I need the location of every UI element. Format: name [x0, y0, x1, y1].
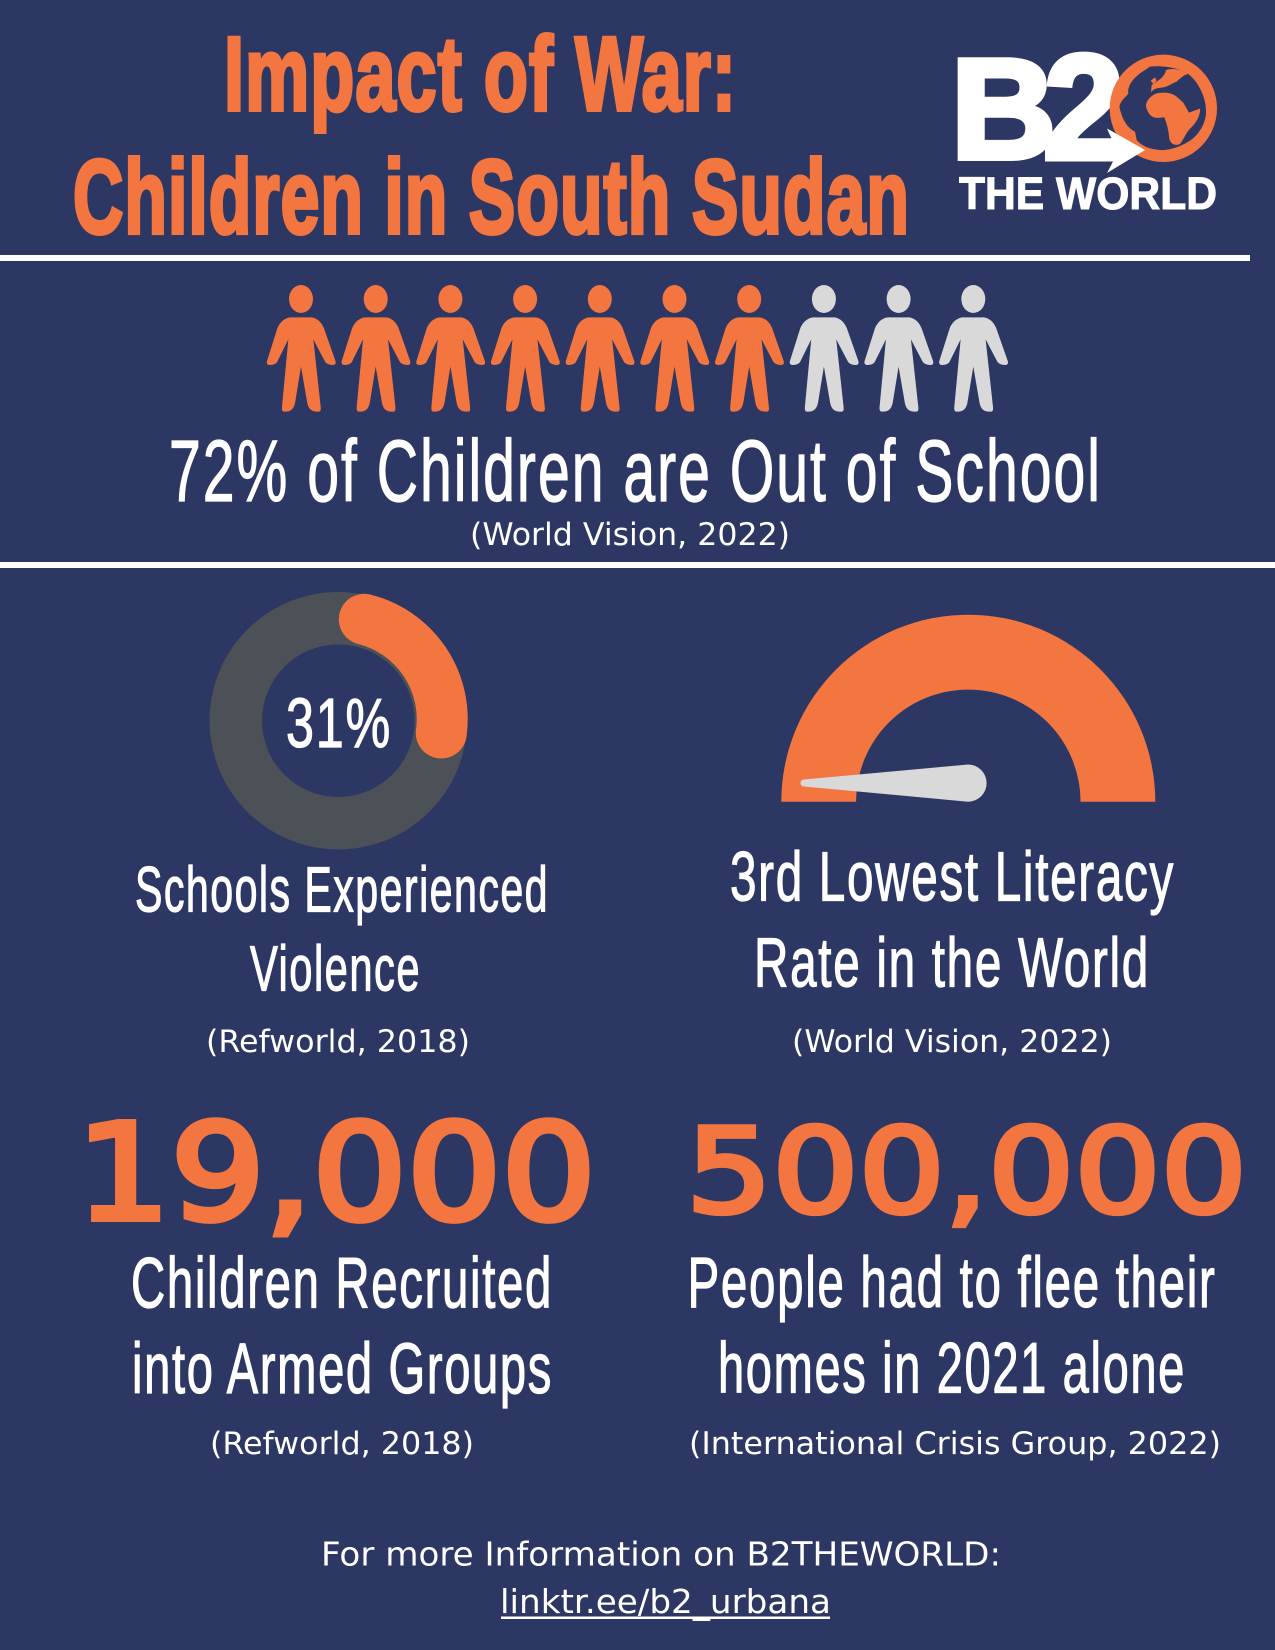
pictogram: 7 of 10 children	[267, 285, 1008, 412]
logo B2 lettering: 2	[1044, 25, 1124, 190]
logo B2 lettering	[951, 25, 1124, 190]
footer: For more Information on B2THEWORLD:	[321, 1534, 1001, 1574]
title	[73, 16, 910, 256]
label: recruited	[131, 1244, 553, 1409]
logo: B2 The World	[951, 25, 1217, 219]
source: Refworld: (Refworld, 2018)	[206, 1024, 470, 1060]
gauge chart	[781, 615, 1155, 802]
source: Refworld: (Refworld, 2018)	[210, 1426, 474, 1462]
donut chart: 31%	[236, 618, 442, 823]
label: recruited: Children Recruited	[131, 1244, 553, 1324]
divider	[0, 562, 1275, 568]
stat: 19,000: 19,000	[76, 1097, 596, 1251]
label: flee	[688, 1244, 1216, 1408]
source: World Vision: (World Vision, 2022)	[470, 517, 790, 553]
label: schools: Schools Experienced	[135, 854, 549, 926]
footer	[321, 1534, 1001, 1621]
label: schools: Violence	[250, 932, 421, 1004]
orange figures	[267, 285, 784, 412]
footer: linktr.ee/b2_urbana	[500, 1582, 831, 1621]
label: literacy	[730, 838, 1175, 1002]
donut chart: 31%: 31%	[286, 684, 392, 762]
divider	[0, 255, 1250, 261]
logo arrow	[1045, 128, 1145, 173]
stat: 500,000: 500,000	[686, 1103, 1247, 1240]
logo B2 lettering: B	[951, 30, 1056, 189]
label: recruited: into Armed Groups	[132, 1330, 553, 1409]
grey figures	[790, 285, 1008, 412]
source: International Crisis Group: (International Crisis Group, 2022)	[689, 1426, 1221, 1462]
logo globe	[1110, 55, 1217, 162]
source: World Vision: (World Vision, 2022)	[792, 1024, 1112, 1060]
label: schools	[135, 854, 549, 1004]
title: Impact of War:	[224, 16, 737, 133]
logo The World: THE WORLD	[959, 168, 1217, 219]
